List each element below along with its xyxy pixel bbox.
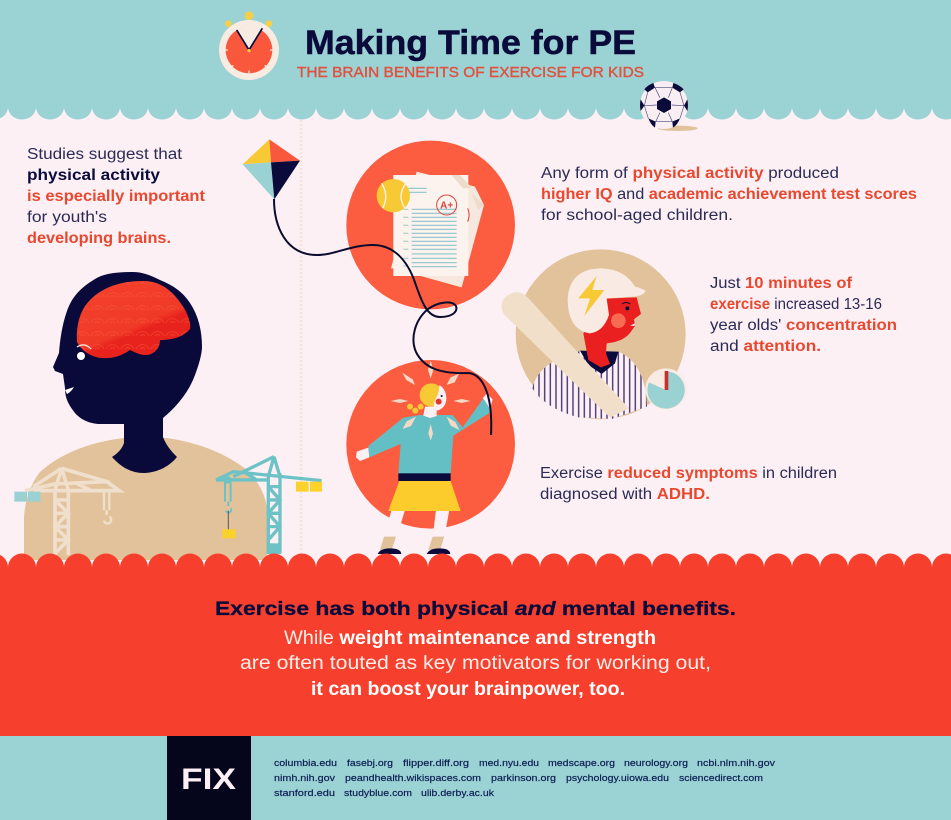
beige circle — [516, 249, 686, 419]
brain — [76, 281, 190, 358]
sources list: psychology.uiowa.edu — [566, 773, 669, 784]
text block: studies suggest: physical activity — [27, 167, 160, 184]
header band — [0, 0, 951, 121]
belt — [398, 473, 451, 481]
sources list: nimh.nih.gov — [274, 773, 335, 784]
sources list: studyblue.com — [344, 788, 412, 799]
panel: batter circle — [502, 249, 687, 423]
text block: IQ and achievement — [541, 165, 917, 224]
legs — [378, 510, 450, 554]
head silhouette — [53, 272, 202, 473]
conclusion text — [240, 628, 711, 700]
hands — [356, 448, 369, 461]
text block: studies suggest: is especially important — [27, 188, 205, 205]
illustration: cream crane — [14, 468, 119, 555]
text block: ADHD: Exercise reduced symptoms in children — [540, 465, 837, 482]
kite string — [274, 199, 491, 435]
text block: concentration: exercise increased 13-16 — [710, 296, 882, 313]
logo: FIX: FIX — [181, 763, 236, 796]
title: Making Time for PE — [305, 24, 636, 62]
sources list: ulib.derby.ac.uk — [421, 788, 494, 799]
sources list — [274, 758, 775, 799]
text block: IQ and achievement: for school-aged children. — [541, 207, 733, 224]
sources list: sciencedirect.com — [679, 773, 763, 784]
skirt — [388, 481, 461, 511]
text block: concentration: year olds' concentration — [710, 317, 897, 334]
conclusion text: are often touted as key motivators for working out, — [240, 653, 711, 674]
sources list: flipper.diff.org — [403, 758, 469, 769]
text block: IQ and achievement: higher IQ and academic achievement test scores — [541, 186, 917, 203]
lightning bolt — [578, 276, 604, 316]
head and hair — [407, 383, 446, 418]
icon: kite — [243, 139, 300, 199]
panel: red conclusion band — [0, 553, 951, 736]
text block: studies suggest: developing brains. — [27, 230, 171, 247]
icon: soccer ball — [640, 81, 698, 131]
text block: IQ and achievement: Any form of physical activity produced — [541, 165, 839, 182]
eye and mouth — [65, 345, 91, 394]
text block: concentration — [710, 275, 897, 355]
test papers: A+ — [440, 201, 453, 212]
collar — [580, 351, 618, 374]
conclusion heading: Exercise has both physical and mental benefits. — [215, 598, 736, 620]
panel: test papers circle — [346, 141, 515, 309]
dotted vertical guide — [300, 108, 302, 553]
sources list: columbia.edu — [274, 758, 337, 769]
sources list: ncbi.nlm.nih.gov — [697, 758, 775, 769]
text block: ADHD — [540, 465, 837, 503]
illustration: child silhouette with brain — [24, 272, 267, 560]
orange circle — [346, 141, 515, 309]
sources list: neurology.org — [624, 758, 688, 769]
sweater — [368, 398, 492, 474]
text block: ADHD: diagnosed with ADHD. — [540, 486, 710, 503]
sources list: peandhealth.wikispaces.com — [345, 773, 481, 784]
text block: concentration: Just 10 minutes of — [710, 275, 853, 292]
text block: studies suggest: Studies suggest that — [27, 146, 183, 163]
sources list: stanford.edu — [274, 788, 335, 799]
conclusion text: it can boost your brainpower, too. — [311, 679, 625, 700]
text block: concentration: and attention. — [710, 338, 821, 355]
sources list: fasebj.org — [347, 758, 393, 769]
text block: studies suggest — [27, 146, 205, 247]
orange circle — [346, 360, 515, 529]
shoulders — [24, 438, 267, 560]
illustration: teal crane — [216, 457, 322, 554]
sources list: med.nyu.edu — [479, 758, 539, 769]
text block: studies suggest: for youth's — [27, 209, 107, 226]
subtitle: THE BRAIN BENEFITS OF EXERCISE FOR KIDS — [297, 65, 644, 81]
helmet — [568, 268, 646, 333]
icon: stopwatch — [219, 11, 279, 80]
panel: girl flying kite — [346, 360, 515, 554]
excitement rays — [391, 361, 471, 441]
mini clock — [645, 368, 687, 410]
neck and face — [583, 297, 641, 367]
sources list: parkinson.org — [491, 773, 556, 784]
panel: footer — [0, 736, 951, 820]
striped shirt — [532, 351, 647, 419]
logo: FIX — [167, 736, 251, 820]
sources list: medscape.org — [548, 758, 615, 769]
conclusion text: While weight maintenance and strength — [284, 628, 656, 649]
baseball bat — [502, 292, 629, 418]
tennis ball — [377, 179, 410, 212]
test papers — [391, 172, 484, 287]
